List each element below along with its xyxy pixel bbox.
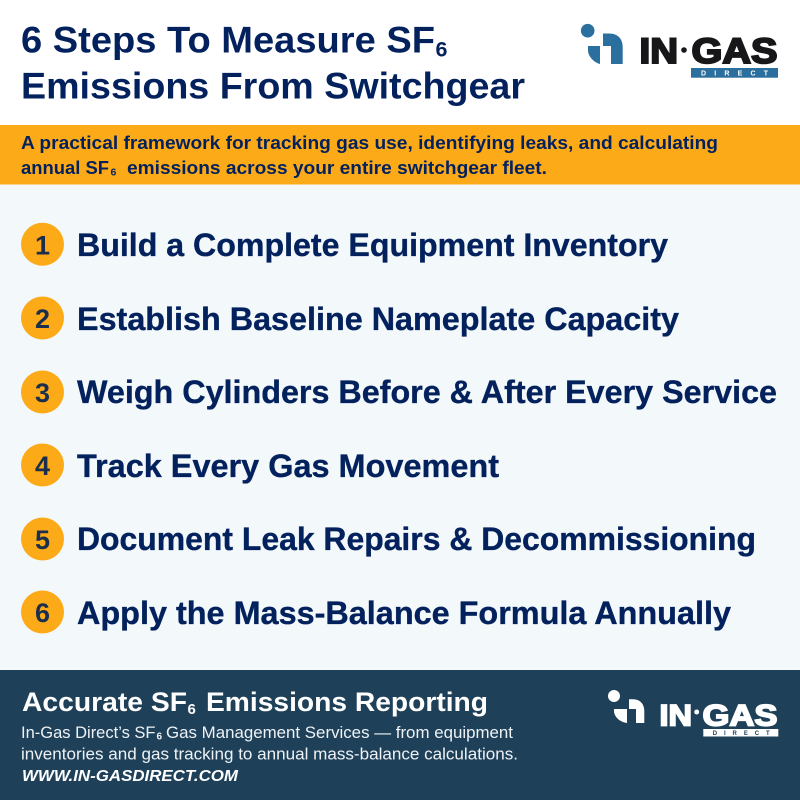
- footer panel: [0, 670, 800, 800]
- footer description: In-Gas Direct’s SF: [21, 724, 156, 742]
- step 4: 4: [35, 451, 50, 481]
- footer description: 6: [156, 732, 162, 742]
- logo: In-Gas Direct, white: GAS: [702, 699, 778, 732]
- step 3: Weigh Cylinders Before & After Every Service: [77, 374, 777, 410]
- step 6: Apply the Mass-Balance Formula Annually: [77, 595, 731, 631]
- website: WWW.IN-GASDIRECT.COM: [22, 768, 239, 785]
- footer heading: Accurate SF: [22, 687, 187, 717]
- title: 6: [436, 38, 448, 62]
- footer description: [21, 724, 518, 764]
- subtitle text: [21, 132, 718, 178]
- step 5: Document Leak Repairs & Decommissioning: [77, 521, 756, 557]
- logo: In-Gas Direct, colour: IN: [640, 31, 678, 71]
- subtitle text: A practical framework for tracking gas use, identifying leaks, and calculating: [21, 132, 718, 153]
- title: 6 Steps To Measure SF: [21, 20, 435, 60]
- header panel: [0, 0, 800, 125]
- step 3: 3: [35, 378, 50, 408]
- steps panel: [0, 184, 800, 670]
- step 6: 6: [35, 598, 50, 628]
- logo: In-Gas Direct, white: IN: [660, 699, 692, 732]
- step 1: Build a Complete Equipment Inventory: [77, 227, 668, 263]
- logo: In-Gas Direct, colour: [581, 24, 778, 78]
- step 2: Establish Baseline Nameplate Capacity: [77, 301, 679, 337]
- subtitle text: emissions across your entire switchgear fleet.: [127, 157, 547, 178]
- step 1: 1: [35, 230, 50, 260]
- footer heading: [22, 687, 488, 718]
- subtitle banner: [0, 125, 800, 184]
- step 4: Track Every Gas Movement: [77, 448, 499, 484]
- step 5: 5: [35, 525, 50, 555]
- subtitle text: 6: [110, 166, 116, 178]
- footer heading: Emissions Reporting: [206, 687, 488, 717]
- logo: In-Gas Direct, white: [608, 690, 778, 737]
- step 2: 2: [35, 304, 50, 334]
- logo: In-Gas Direct, colour: DIRECT: [701, 71, 769, 78]
- footer heading: 6: [188, 701, 196, 718]
- footer description: inventories and gas tracking to annual mass-balance calculations.: [21, 746, 518, 764]
- title: Emissions From Switchgear: [21, 66, 525, 106]
- footer description: Gas Management Services — from equipment: [166, 724, 513, 742]
- title: [21, 20, 525, 106]
- logo: In-Gas Direct, colour: GAS: [692, 31, 778, 71]
- logo: In-Gas Direct, white: DIRECT: [713, 731, 770, 737]
- subtitle text: annual SF: [21, 157, 109, 178]
